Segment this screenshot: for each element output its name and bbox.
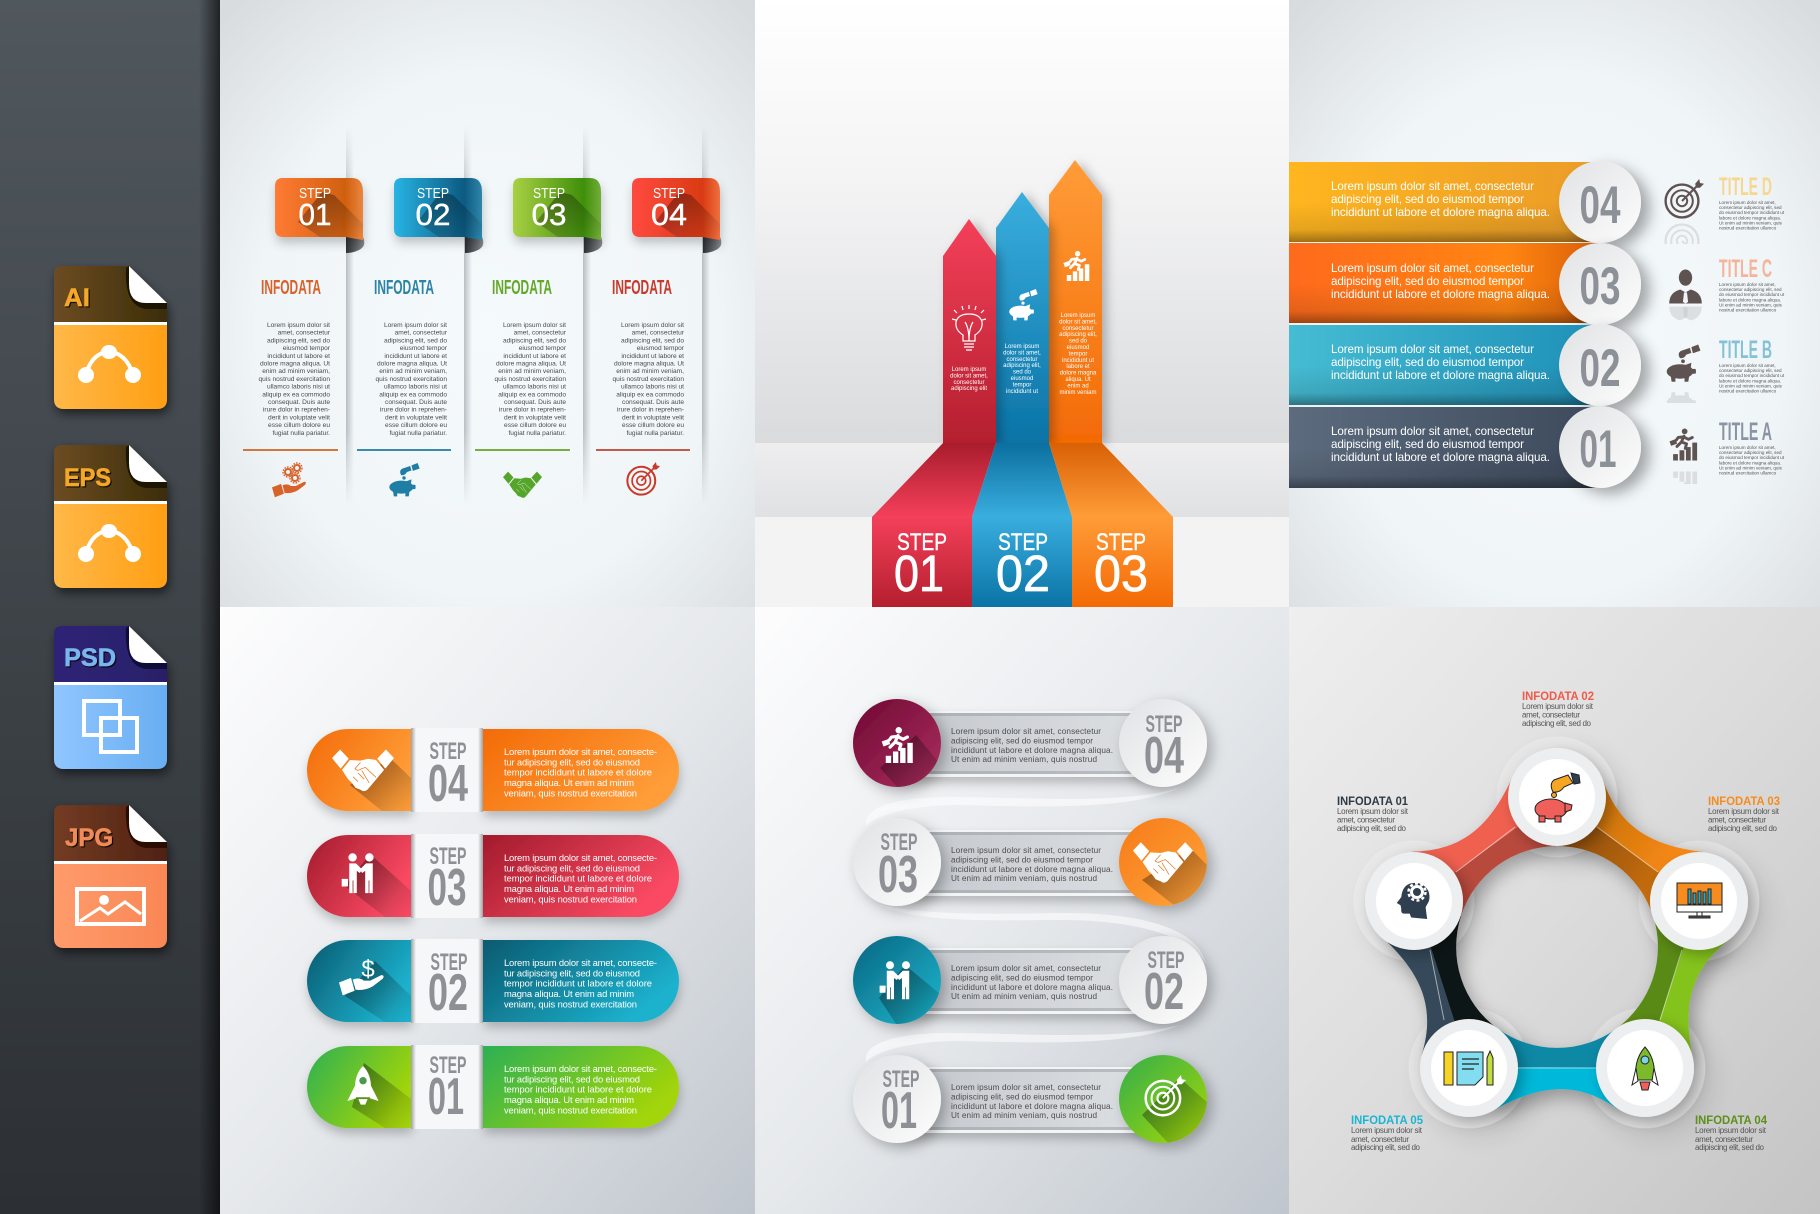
row: step 02: STEP xyxy=(1148,947,1184,974)
text block: title B: do eiusmod tempor incididunt ut xyxy=(1719,373,1785,378)
text block: column 2: derit in voluptate velit xyxy=(385,414,447,421)
text block: title B: nostrud exercitation ullamco xyxy=(1719,388,1777,394)
text block: column 1: dolore magna aliqua. Ut xyxy=(260,360,330,368)
text block: column 2: eiusmod tempor xyxy=(400,345,448,352)
text block: column 1: aliquip ex ea commodo xyxy=(262,391,330,398)
text block: title B: consectetur adipiscing elit, sed xyxy=(1719,368,1782,373)
row: step 01: Lorem ipsum dolor sit amet, consectetur xyxy=(951,1083,1101,1092)
pill: step 03: 03 xyxy=(428,859,466,917)
icon: AI file: AI xyxy=(64,284,90,312)
text block: column 4: esse cillum dolore eu xyxy=(622,422,684,429)
text block: column 1: fugiat nulla pariatur. xyxy=(272,430,330,437)
text block: column 4: amet, consectetur xyxy=(632,330,685,337)
label: infodata 03: Lorem ipsum dolor sit xyxy=(1708,807,1780,816)
pill: step 03: STEP xyxy=(430,843,466,870)
pill: step 04: STEP xyxy=(430,738,466,765)
label: infodata 05: Lorem ipsum dolor sit xyxy=(1351,1126,1423,1135)
bar A: Lorem ipsum dolor sit amet, consectetur xyxy=(1331,425,1534,438)
text block: column 2: dolore magna aliqua. Ut xyxy=(377,360,447,368)
text block: column 2: aliquip ex ea commodo xyxy=(379,391,447,398)
text block: column 4: Lorem ipsum dolor sit xyxy=(621,322,684,329)
text block: title B: Lorem ipsum dolor sit amet, xyxy=(1719,363,1776,368)
text block: column 1: Lorem ipsum dolor sit xyxy=(267,322,330,329)
text block: column 3: ullamco laboris nisi ut xyxy=(503,384,566,391)
text block: column 4: ullamco laboris nisi ut xyxy=(621,384,684,391)
icon: hand with gears xyxy=(272,463,306,497)
pill: step 02: tur adipiscing elit, sed do eiusmod xyxy=(504,968,640,978)
pill: step 01 xyxy=(307,1045,679,1129)
icon: EPS file: EPS xyxy=(64,464,111,492)
ribbon: step 04: 04 xyxy=(651,197,687,232)
step 01 front: STEP xyxy=(897,529,947,556)
label: infodata 04 xyxy=(1695,1115,1768,1152)
step 03 front: STEP xyxy=(1096,529,1146,556)
bar D: incididunt ut labore et dolore magna aliqua. xyxy=(1331,206,1550,219)
text block: title A: labore et dolore magna aliqua. xyxy=(1719,460,1781,465)
row: step 03: adipiscing elit, sed do eiusmod tempor xyxy=(951,856,1093,864)
text block: column 3: fugiat nulla pariatur. xyxy=(508,430,566,437)
row: step 03: incididunt ut labore et dolore magna aliqua. xyxy=(951,865,1113,874)
floor ribbons xyxy=(872,443,1173,517)
text block: column 1: irure dolor in reprehen- xyxy=(263,407,330,414)
step 03 front xyxy=(1072,517,1173,607)
pill: step 03: veniam, quis nostrud exercitation xyxy=(504,894,637,904)
text block: column 2: quis nostrud exercitation xyxy=(376,376,447,383)
pill: step 03: tur adipiscing elit, sed do eiusmod xyxy=(504,862,640,874)
row: step 02: incididunt ut labore et dolore magna aliqua. xyxy=(951,983,1113,992)
row: step 01: STEP xyxy=(882,1066,920,1093)
text block: column 4: dolore magna aliqua. Ut xyxy=(614,360,684,368)
label: infodata 05: amet, consectetur xyxy=(1351,1135,1409,1144)
text block: title A: Lorem ipsum dolor sit amet, xyxy=(1719,445,1776,450)
label: infodata 02: adipiscing elit, sed do xyxy=(1522,719,1592,728)
row: step 01: adipiscing elit, sed do eiusmod tempor xyxy=(951,1092,1093,1102)
label: infodata 05: adipiscing elit, sed do xyxy=(1351,1143,1421,1152)
row: step 01: incididunt ut labore et dolore magna aliqua. xyxy=(951,1102,1113,1111)
ribbon: step 01 xyxy=(275,178,364,253)
pill: step 04: tempor incididunt ut labore et dolore xyxy=(504,766,652,778)
text block: column 2: ullamco laboris nisi ut xyxy=(384,384,447,391)
text block: orange arrow: dolor sit amet, xyxy=(1059,319,1097,325)
pill: step 02 xyxy=(307,939,679,1023)
row: step 03: 03 xyxy=(878,846,918,904)
ribbon: step 03: STEP xyxy=(533,185,565,202)
label: infodata 02: Lorem ipsum dolor sit xyxy=(1522,702,1594,711)
row: step 04: Lorem ipsum dolor sit amet, consectetur xyxy=(951,727,1101,736)
bar D: Lorem ipsum dolor sit amet, consectetur xyxy=(1331,180,1534,193)
text block: title C: do eiusmod tempor incididunt ut xyxy=(1719,292,1785,297)
text block: red arrow: consectetur xyxy=(953,380,985,386)
label: infodata 04: Lorem ipsum dolor sit xyxy=(1695,1126,1767,1135)
step 03 front: 03 xyxy=(1094,545,1148,602)
panel: five node ring xyxy=(1289,607,1820,1214)
text block: column 2: Lorem ipsum dolor sit xyxy=(384,322,447,329)
text block: column 1: consequat. Duis aute xyxy=(268,399,330,406)
text block: title A: consectetur adipiscing elit, sed xyxy=(1719,450,1782,455)
label: infodata 01: INFODATA 01 xyxy=(1337,796,1409,808)
label: infodata 01: Lorem ipsum dolor sit xyxy=(1337,807,1409,816)
node: notes xyxy=(1420,1019,1518,1117)
heading: infodata column 4: INFODATA xyxy=(612,277,672,299)
bar B: 02 xyxy=(1580,339,1620,398)
text block: orange arrow: labore et xyxy=(1066,364,1090,370)
ribbon: step 02: STEP xyxy=(417,185,449,202)
title D: TITLE D xyxy=(1719,173,1772,201)
text block: column 1: eiusmod tempor xyxy=(283,345,331,352)
title C: TITLE C xyxy=(1719,255,1772,283)
heading: infodata column 3: INFODATA xyxy=(492,277,552,299)
panel: four horizontal bars xyxy=(1289,0,1820,607)
text block: title D: do eiusmod tempor incididunt ut xyxy=(1719,210,1785,215)
pill: step 02: 02 xyxy=(428,964,468,1022)
step 02 front xyxy=(972,517,1072,607)
pill: step 02: Lorem ipsum dolor sit amet, consecte- xyxy=(504,957,657,968)
row: step 01: Ut enim ad minim veniam, quis nostrud xyxy=(951,1111,1097,1120)
text block: orange arrow: Lorem ipsum xyxy=(1061,313,1095,319)
ribbon: step 03 xyxy=(513,178,602,253)
pill: step 03: Lorem ipsum dolor sit amet, consecte- xyxy=(504,852,657,863)
label: infodata 04: INFODATA 04 xyxy=(1695,1115,1768,1127)
node: piggy bank xyxy=(1508,748,1606,846)
pill: step 01: magna aliqua. Ut enim ad minim xyxy=(504,1094,634,1105)
text block: column 2: fugiat nulla pariatur. xyxy=(389,430,447,437)
pill: step 04: Lorem ipsum dolor sit amet, consecte- xyxy=(504,746,657,757)
text block: title C: Ut enim ad minim veniam, quis xyxy=(1719,302,1783,307)
row: step 04: STEP xyxy=(1146,711,1182,738)
label: infodata 03: INFODATA 03 xyxy=(1708,796,1780,808)
row: step 04: incididunt ut labore et dolore magna aliqua. xyxy=(951,746,1113,755)
text block: title B: Ut enim ad minim veniam, quis xyxy=(1719,383,1783,388)
row: step 01 xyxy=(853,1055,1210,1145)
bar B: incididunt ut labore et dolore magna aliqua. xyxy=(1331,369,1550,382)
text block: column 1: quis nostrud exercitation xyxy=(259,376,330,383)
text block: title C: nostrud exercitation ullamco xyxy=(1719,308,1777,312)
panel: four pills xyxy=(220,607,755,1214)
text block: column 1: incididunt ut labore et xyxy=(267,353,330,360)
step 01 front: 01 xyxy=(894,545,944,602)
text block: title C: labore et dolore magna aliqua. xyxy=(1719,297,1781,302)
text block: column 2: incididunt ut labore et xyxy=(384,353,447,360)
text block: column 3: Lorem ipsum dolor sit xyxy=(503,322,566,329)
bar C: 03 xyxy=(1580,257,1620,316)
pill: step 02: STEP xyxy=(430,949,468,976)
text block: blue arrow: eiusmod xyxy=(1011,376,1033,382)
icon: handshake xyxy=(503,472,542,498)
bar B: adipiscing elit, sed do eiusmod tempor xyxy=(1331,356,1524,369)
text block: orange arrow: dolore magna xyxy=(1060,371,1097,377)
pill: step 01: STEP xyxy=(430,1052,466,1079)
text block: column 1: adipiscing elit, sed do xyxy=(267,337,330,344)
band: navy xyxy=(1341,886,1539,1082)
heading: infodata column 1: INFODATA xyxy=(261,277,321,299)
row: step 02: Ut enim ad minim veniam, quis nostrud xyxy=(951,992,1097,1001)
white winding ribbons xyxy=(866,788,1206,1062)
text block: title D: nostrud exercitation ullamco xyxy=(1719,226,1777,230)
bar B xyxy=(1289,324,1641,406)
label: infodata 01 xyxy=(1337,796,1409,833)
text block: orange arrow: adipiscing elit, xyxy=(1059,332,1097,338)
bar D: 04 xyxy=(1580,176,1621,235)
icon: white piggy bank xyxy=(1009,289,1038,320)
icon: piggy bank xyxy=(389,463,420,496)
text block: column 2: esse cillum dolore eu xyxy=(385,422,447,429)
pill: step 04: tur adipiscing elit, sed do eiusmod xyxy=(504,756,640,768)
text block: title D: Ut enim ad minim veniam, quis xyxy=(1719,220,1783,225)
text block: column 3: irure dolor in reprehen- xyxy=(499,407,566,414)
row: step 03: STEP xyxy=(880,829,918,856)
row: step 02 xyxy=(853,936,1207,1030)
text block: title B: labore et dolore magna aliqua. xyxy=(1719,378,1781,383)
text block: title D: Lorem ipsum dolor sit amet, xyxy=(1719,200,1776,205)
row: step 03 xyxy=(853,818,1210,910)
title B: TITLE B xyxy=(1719,336,1772,364)
bar A xyxy=(1289,406,1641,488)
icon: JPG file xyxy=(54,805,167,948)
text block: column 4: irure dolor in reprehen- xyxy=(617,407,684,414)
text block: column 4: adipiscing elit, sed do xyxy=(621,337,684,344)
ribbon: step 01: STEP xyxy=(299,185,331,202)
text block: column 4: derit in voluptate velit xyxy=(622,414,684,421)
bar B: Lorem ipsum dolor sit amet, consectetur xyxy=(1331,343,1534,356)
text block: title C: consectetur adipiscing elit, sed xyxy=(1719,287,1782,292)
bar C: Lorem ipsum dolor sit amet, consectetur xyxy=(1331,262,1534,275)
label: infodata 03 xyxy=(1708,796,1780,833)
ribbon: step 01: 01 xyxy=(298,197,332,232)
text block: blue arrow: tempor xyxy=(1013,382,1031,388)
pill: step 01: tempor incididunt ut labore et dolore xyxy=(504,1084,652,1094)
text block: title D: labore et dolore magna aliqua. xyxy=(1719,215,1781,220)
text block: blue arrow: consectetur xyxy=(1006,357,1038,363)
text block: title D: consectetur adipiscing elit, sed xyxy=(1719,205,1782,210)
text block: title A: nostrud exercitation ullamco xyxy=(1719,470,1777,476)
pill: step 04: magna aliqua. Ut enim ad minim xyxy=(504,777,634,788)
text block: red arrow: dolor sit amet, xyxy=(950,373,988,379)
pill: step 01: 01 xyxy=(428,1068,464,1126)
icon: AI file xyxy=(54,266,167,409)
row: step 04 xyxy=(853,699,1207,790)
row: step 01: 01 xyxy=(881,1082,917,1140)
bar C: adipiscing elit, sed do eiusmod tempor xyxy=(1331,275,1524,288)
label: infodata 01: amet, consectetur xyxy=(1337,816,1395,824)
text block: column 1: derit in voluptate velit xyxy=(268,414,330,421)
bar A: 01 xyxy=(1580,420,1616,479)
row: step 03: Lorem ipsum dolor sit amet, consectetur xyxy=(951,846,1101,855)
arrow: red xyxy=(943,219,996,443)
ribbon: step 04 xyxy=(632,178,721,253)
text block: column 3: esse cillum dolore eu xyxy=(504,422,566,429)
row: step 02: 02 xyxy=(1144,963,1184,1021)
text block: column 4: incididunt ut labore et xyxy=(621,353,684,360)
pill: step 01: tur adipiscing elit, sed do eiusmod xyxy=(504,1074,640,1084)
ribbon: step 02: 02 xyxy=(416,197,450,232)
text block: column 2: amet, consectetur xyxy=(395,330,448,337)
icon: target xyxy=(1664,179,1704,244)
text block: column 2: adipiscing elit, sed do xyxy=(384,337,447,344)
sidebar xyxy=(0,0,220,1214)
row: step 04: adipiscing elit, sed do eiusmod tempor xyxy=(951,736,1093,746)
icon: JPG file: JPG xyxy=(65,824,113,852)
text block: column 1: esse cillum dolore eu xyxy=(268,422,330,429)
bar D: adipiscing elit, sed do eiusmod tempor xyxy=(1331,193,1524,206)
pill: step 03: tempor incididunt ut labore et dolore xyxy=(504,872,652,884)
label: infodata 05: INFODATA 05 xyxy=(1351,1115,1424,1127)
text block: column 4: fugiat nulla pariatur. xyxy=(626,430,684,437)
pill: step 02: magna aliqua. Ut enim ad minim xyxy=(504,988,634,999)
label: infodata 03: adipiscing elit, sed do xyxy=(1708,824,1778,833)
arrow: blue xyxy=(996,192,1049,443)
heading: infodata column 2: INFODATA xyxy=(374,277,434,299)
text block: column 3: derit in voluptate velit xyxy=(504,414,566,421)
row: step 04: Ut enim ad minim veniam, quis nostrud xyxy=(951,755,1097,764)
text block: column 3: consequat. Duis aute xyxy=(504,399,566,406)
icon: PSD file: PSD xyxy=(64,644,116,672)
text block: column 3: adipiscing elit, sed do xyxy=(503,337,566,344)
text block: column 3: enim ad minim veniam, xyxy=(498,368,566,375)
pill: step 02: $ xyxy=(361,956,375,983)
node: head with gear xyxy=(1365,852,1463,950)
bar C: incididunt ut labore et dolore magna aliqua. xyxy=(1331,288,1550,301)
text block: blue arrow: incididunt ut xyxy=(1006,389,1038,395)
label: infodata 01: adipiscing elit, sed do xyxy=(1337,824,1407,833)
band: red xyxy=(1398,757,1573,937)
title A: TITLE A xyxy=(1719,418,1772,446)
label: infodata 03: amet, consectetur xyxy=(1708,816,1766,824)
icon: EPS file xyxy=(54,445,167,588)
icon: businessman xyxy=(1669,270,1702,320)
text block: red arrow: Lorem ipsum xyxy=(952,367,986,373)
ribbon: step 03: 03 xyxy=(532,197,566,232)
text block: orange arrow: eiusmod xyxy=(1067,345,1089,351)
text block: column 2: enim ad minim veniam, xyxy=(379,368,447,375)
ribbon: step 04: STEP xyxy=(653,185,685,202)
icon: runner on bars xyxy=(1063,251,1089,281)
text block: blue arrow: Lorem ipsum xyxy=(1005,344,1039,350)
bar D xyxy=(1289,161,1641,243)
text block: column 1: amet, consectetur xyxy=(278,330,331,337)
row: step 02: adipiscing elit, sed do eiusmod tempor xyxy=(951,974,1093,982)
text block: orange arrow: aliqua. Ut xyxy=(1065,377,1091,383)
icon: target xyxy=(627,462,660,495)
step 02 front: 02 xyxy=(996,545,1050,602)
text block: column 3: dolore magna aliqua. Ut xyxy=(496,360,566,368)
label: infodata 02 xyxy=(1522,691,1594,728)
pill: step 03: magna aliqua. Ut enim ad minim xyxy=(504,883,634,894)
text block: blue arrow: adipiscing elit, xyxy=(1003,363,1041,369)
text block: title A: do eiusmod tempor incididunt ut xyxy=(1719,455,1785,460)
pill: step 04: veniam, quis nostrud exercitation xyxy=(504,788,637,798)
label: infodata 05 xyxy=(1351,1115,1424,1152)
row: step 03: Ut enim ad minim veniam, quis nostrud xyxy=(951,874,1097,883)
text block: orange arrow: enim ad xyxy=(1067,383,1089,389)
text block: column 4: consequat. Duis aute xyxy=(622,399,684,406)
icon: piggy bank xyxy=(1666,344,1700,403)
pill: step 03 xyxy=(307,834,679,918)
text block: column 4: quis nostrud exercitation xyxy=(613,376,684,383)
icon: lightbulb xyxy=(952,305,986,350)
text block: column 3: incididunt ut labore et xyxy=(503,353,566,360)
label: infodata 04: amet, consectetur xyxy=(1695,1135,1753,1144)
text block: column 1: enim ad minim veniam, xyxy=(262,368,330,375)
text block: column 2: consequat. Duis aute xyxy=(385,399,447,406)
pill: step 04 xyxy=(307,728,679,813)
bar C xyxy=(1289,243,1641,325)
row: step 04: 04 xyxy=(1144,727,1184,785)
step 01 front xyxy=(872,517,972,607)
text block: column 3: eiusmod tempor xyxy=(519,345,567,352)
arrow: orange xyxy=(1049,160,1102,443)
band: teal xyxy=(1457,972,1655,1168)
text block: column 3: amet, consectetur xyxy=(514,330,567,337)
panel: winding steps xyxy=(755,607,1289,1214)
text block: column 3: aliquip ex ea commodo xyxy=(498,391,566,398)
band: orange xyxy=(1557,780,1703,916)
row: step 02: Lorem ipsum dolor sit amet, consectetur xyxy=(951,964,1101,973)
text block: blue arrow: dolor sit amet, xyxy=(1003,350,1041,356)
text block: column 1: ullamco laboris nisi ut xyxy=(267,384,330,391)
text block: title A: Ut enim ad minim veniam, quis xyxy=(1719,465,1783,470)
pill: step 01: Lorem ipsum dolor sit amet, consecte- xyxy=(504,1063,657,1074)
bar A: incididunt ut labore et dolore magna aliqua. xyxy=(1331,451,1550,464)
text block: column 3: quis nostrud exercitation xyxy=(495,376,566,383)
label: infodata 04: adipiscing elit, sed do xyxy=(1695,1143,1765,1152)
text block: orange arrow: incididunt ut xyxy=(1062,358,1094,364)
text block: column 2: irure dolor in reprehen- xyxy=(380,407,447,414)
text block: column 4: aliquip ex ea commodo xyxy=(616,391,684,398)
text block: orange arrow: sed do xyxy=(1069,339,1088,345)
label: infodata 02: amet, consectetur xyxy=(1522,710,1580,720)
text block: column 4: eiusmod tempor xyxy=(637,345,685,352)
text block: title C: Lorem ipsum dolor sit amet, xyxy=(1719,282,1776,287)
panel: four step columns xyxy=(220,0,755,607)
node: monitor xyxy=(1650,852,1748,950)
icon: runner xyxy=(1670,428,1698,484)
text block: column 4: enim ad minim veniam, xyxy=(616,368,684,375)
text block: red arrow: adipiscing elit xyxy=(951,386,987,392)
bar A: adipiscing elit, sed do eiusmod tempor xyxy=(1331,438,1524,451)
text block: orange arrow: tempor xyxy=(1069,351,1087,357)
text block: orange arrow: minim veniam xyxy=(1059,390,1097,396)
pill: step 01: veniam, quis nostrud exercitation xyxy=(504,1104,637,1116)
node: rocket xyxy=(1596,1019,1694,1117)
band: green xyxy=(1586,895,1761,1076)
pill: step 02: veniam, quis nostrud exercitation xyxy=(504,998,637,1010)
ring bands xyxy=(1341,757,1761,1168)
ribbon: step 02 xyxy=(394,178,483,253)
step 02 front: STEP xyxy=(998,529,1048,556)
pill: step 04: 04 xyxy=(428,755,468,813)
panel: three arrows xyxy=(755,0,1289,607)
pill: step 02: tempor incididunt ut labore et dolore xyxy=(504,978,652,988)
icon: PSD file xyxy=(54,626,167,769)
text block: blue arrow: sed do xyxy=(1013,370,1032,376)
label: infodata 02: INFODATA 02 xyxy=(1522,691,1594,703)
text block: orange arrow: consectetur xyxy=(1062,326,1094,332)
